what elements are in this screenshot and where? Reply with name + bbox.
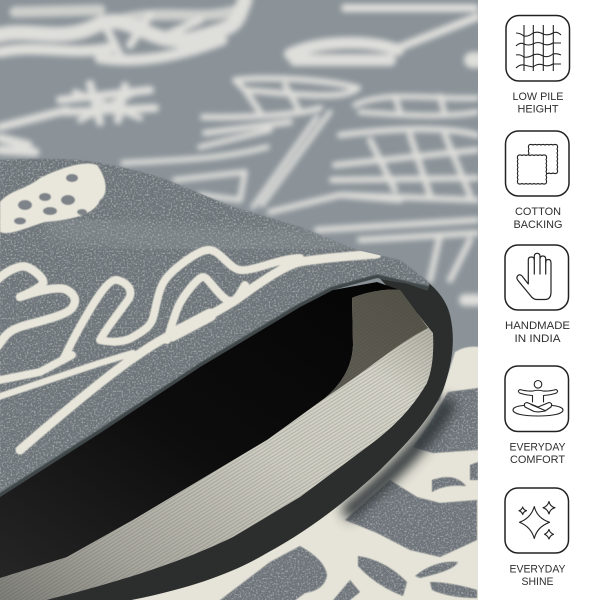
flower motif	[0, 163, 106, 233]
feature: handmade in india	[505, 245, 570, 345]
label	[514, 206, 562, 231]
label	[510, 442, 566, 466]
feature: cotton backing	[506, 131, 569, 231]
cream border bands	[0, 250, 377, 450]
label	[510, 564, 566, 588]
icon: swatches	[506, 131, 569, 196]
label	[512, 91, 564, 116]
label: BACKING	[514, 219, 562, 231]
label: LOW PILE	[512, 91, 564, 103]
label	[505, 320, 570, 345]
label: EVERYDAY	[510, 564, 566, 576]
rolled rug top surface	[0, 159, 430, 497]
icon: hand	[505, 245, 568, 310]
label: SHINE	[522, 576, 554, 588]
dark underside rim	[46, 278, 453, 600]
white panel	[478, 0, 600, 600]
label: IN INDIA	[514, 333, 562, 345]
blurred background rug	[0, 0, 478, 600]
label: COMFORT	[510, 454, 566, 466]
backing weave	[0, 289, 433, 600]
feature: everyday shine	[505, 488, 568, 588]
feature: low pile height	[506, 16, 570, 116]
label: HANDMADE	[505, 320, 570, 332]
cream floor	[100, 347, 484, 600]
cotton backing	[0, 289, 433, 600]
lower right floor rug	[100, 347, 484, 600]
label: HEIGHT	[518, 104, 559, 116]
label: EVERYDAY	[510, 442, 566, 454]
label: COTTON	[515, 206, 561, 218]
feature: everyday comfort	[505, 366, 568, 466]
icon: meditating figure	[505, 366, 568, 432]
interior shadow	[0, 282, 433, 585]
icon: sparkles	[505, 488, 568, 553]
gray patches	[215, 388, 478, 600]
backing shade	[325, 289, 428, 398]
icon: pile grid	[506, 16, 570, 81]
rim shadow on floor	[345, 400, 450, 515]
